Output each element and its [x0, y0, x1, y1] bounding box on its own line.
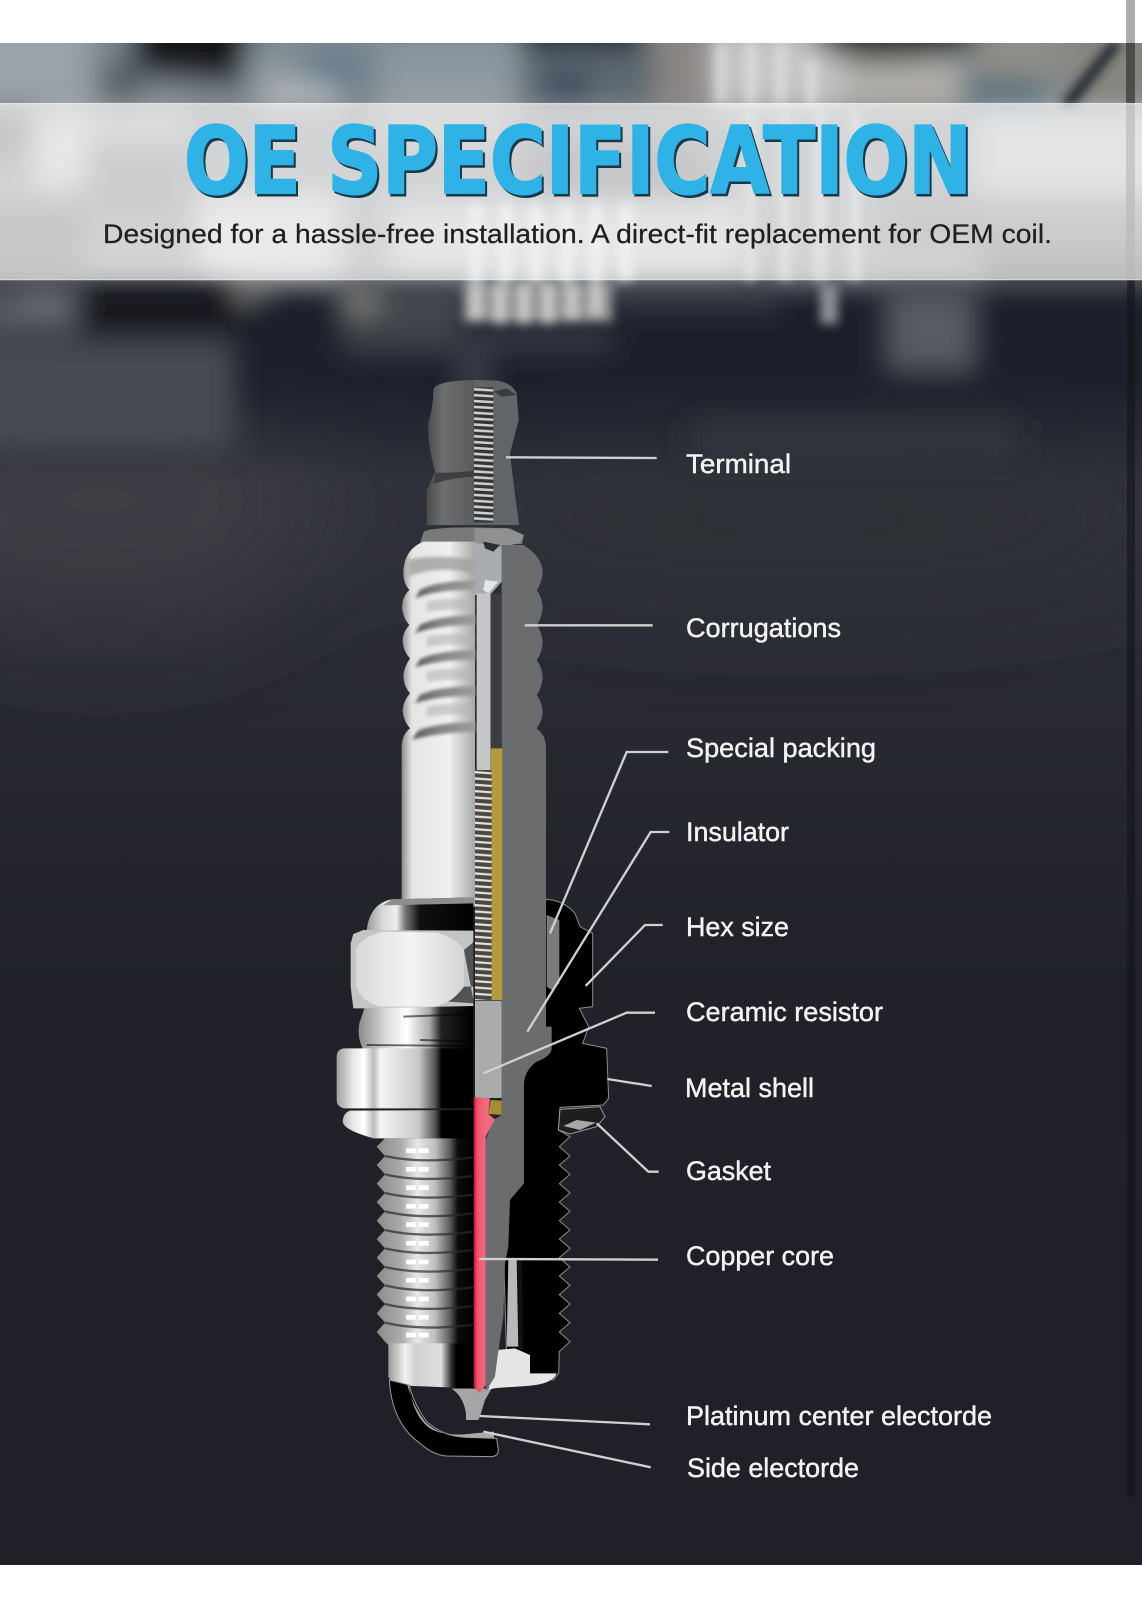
- collar: [420, 527, 524, 547]
- title: OE SPECIFICATION: [184, 107, 972, 215]
- subtitle: Designed for a hassle-free installation. A direct-fit replacement for OEM coil.: [103, 219, 1052, 249]
- leader: special packing: [550, 752, 668, 933]
- leader: metal shell: [607, 1079, 652, 1086]
- waist: [359, 1003, 473, 1050]
- leader lines: [479, 457, 669, 1467]
- leader: copper core: [479, 1255, 658, 1263]
- title: OE SPECIFICATION: [186, 110, 974, 218]
- under-band blurred shapes: [0, 288, 1020, 460]
- leader: ceramic resistor: [483, 1013, 655, 1073]
- label: gasket: Gasket: [686, 1156, 771, 1186]
- nose cylinder: [388, 1343, 473, 1388]
- insulator outer with corrugations: [402, 542, 475, 907]
- blurred fins: [463, 40, 1122, 324]
- hex nut: [351, 930, 474, 1008]
- label: insulator: Insulator: [686, 817, 789, 847]
- ceramic resistor: [475, 1001, 502, 1098]
- terminal spring: [474, 387, 493, 522]
- leader: terminal: [506, 454, 657, 461]
- copper core: [474, 1097, 495, 1393]
- label: special packing: Special packing: [686, 733, 876, 763]
- gasket section: [558, 1107, 605, 1134]
- threads left: [377, 1138, 473, 1345]
- label: hex size: Hex size: [686, 912, 789, 942]
- insulator section: [486, 545, 559, 1392]
- top strip: [0, 43, 102, 103]
- flange: [337, 1048, 473, 1108]
- right edge strip: [1126, 0, 1135, 1497]
- leader: corrugations: [525, 622, 653, 629]
- labels: [685, 449, 992, 1483]
- leader: gasket: [597, 1123, 659, 1172]
- spark plug cutaway illustration: [337, 380, 609, 1457]
- leader: side electrode: [483, 1432, 651, 1467]
- behind translucent band: [532, 94, 643, 103]
- header band: [0, 103, 1142, 280]
- leader: hex size: [586, 925, 663, 986]
- metal shell section: [500, 899, 609, 1380]
- label: copper core: Copper core: [686, 1241, 834, 1271]
- brass seal: [488, 1100, 502, 1115]
- nose section: [488, 1348, 557, 1389]
- label: platinum center electorde: Platinum center electorde: [686, 1401, 992, 1431]
- leader: platinum center electrode: [480, 1416, 650, 1424]
- chrome dome: [367, 897, 473, 933]
- label: terminal: Terminal: [686, 449, 791, 479]
- leader: insulator: [527, 832, 669, 1032]
- label: metal shell: Metal shell: [685, 1073, 814, 1103]
- gasket: [343, 1110, 473, 1138]
- waist highlight lines: [367, 1014, 473, 1046]
- special packing (yellow): [475, 748, 502, 1000]
- label: corrugations: Corrugations: [686, 613, 841, 643]
- inner channel: [475, 542, 502, 771]
- terminal: [427, 380, 519, 525]
- label: ceramic resistor: Ceramic resistor: [686, 997, 883, 1027]
- label: side electorde: Side electorde: [687, 1453, 859, 1483]
- side electrode: [389, 1380, 498, 1457]
- center electrode tip: [452, 1389, 492, 1420]
- dome top rim: [383, 897, 473, 905]
